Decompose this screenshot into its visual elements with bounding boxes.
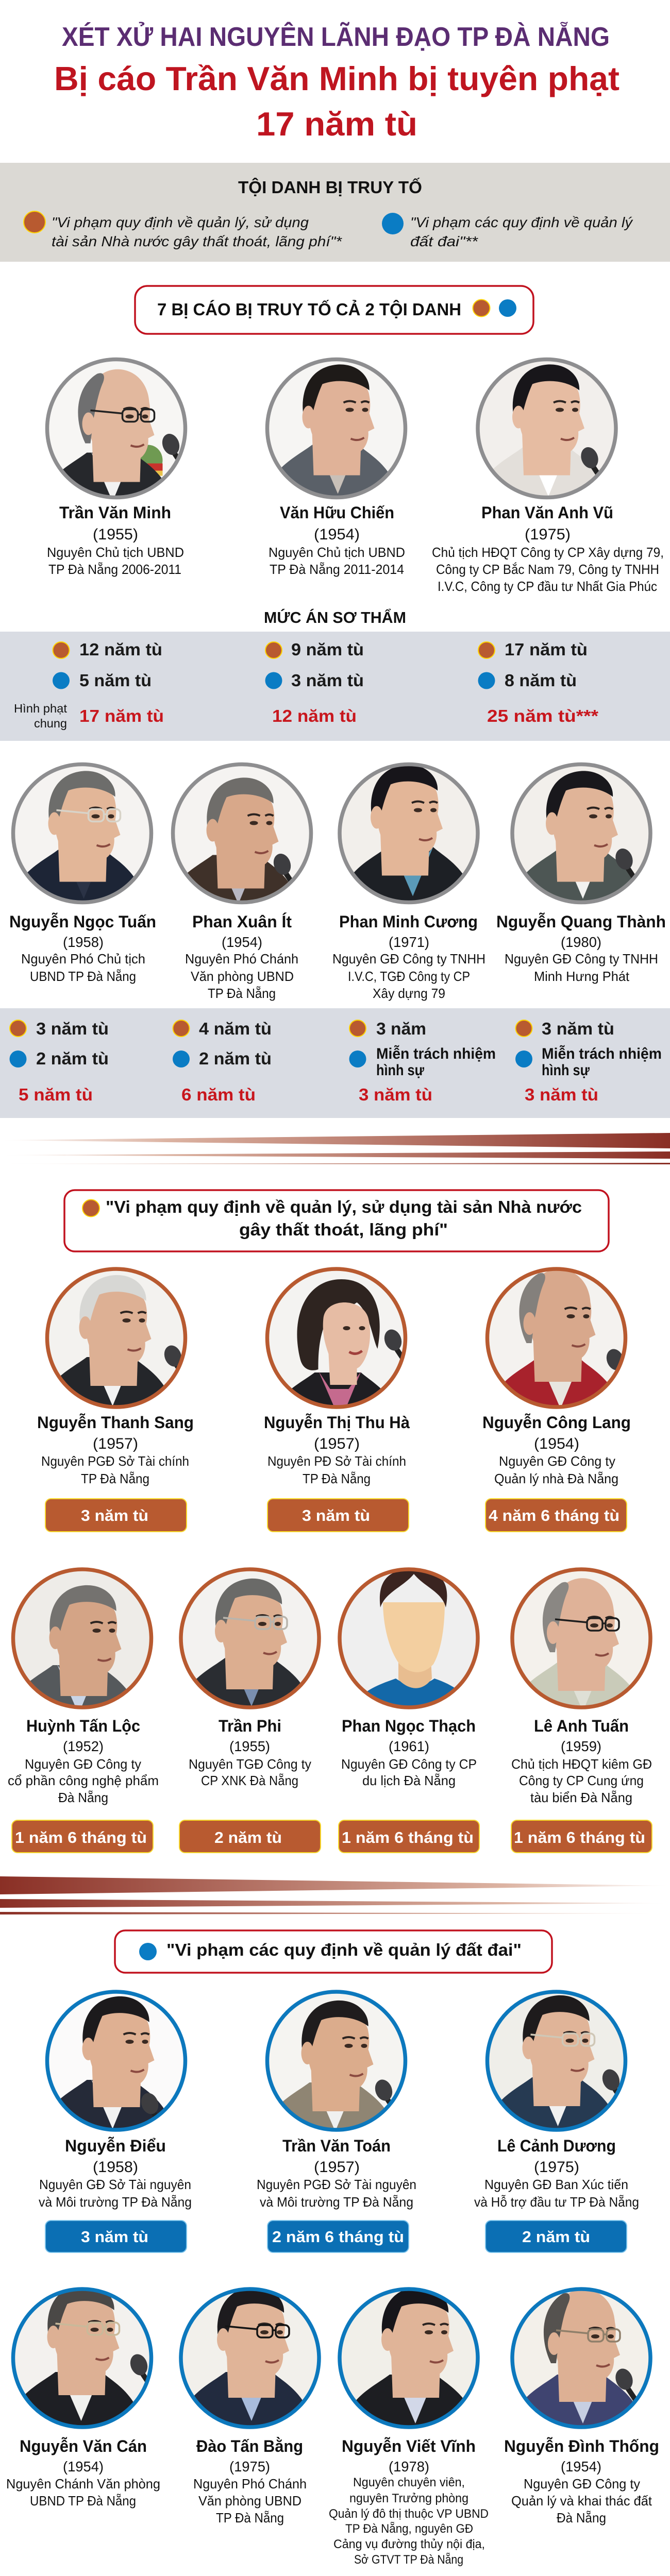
sentences: Văn Hữu Chiến: 3 năm tù — [291, 671, 364, 690]
year: (1978) — [389, 2459, 429, 2475]
sentences: Phan Xuân Ít: 4 năm tù — [199, 1019, 272, 1038]
person: Nguyễn Văn Cán — [6, 2284, 160, 2576]
year: (1961) — [389, 1738, 429, 1754]
sentences: Phan Xuân Ít: 6 năm tù — [181, 1085, 256, 1104]
year: (1954) — [314, 526, 360, 543]
portrait — [340, 2287, 478, 2431]
year: (1954) — [222, 934, 262, 950]
sentence badge: 2 năm tù — [522, 2228, 590, 2246]
role: TP Đà Nẵng — [216, 2510, 284, 2526]
portrait — [39, 360, 188, 509]
role: TP Đà Nẵng 2011-2014 — [270, 562, 404, 577]
panel: sentences next four — [0, 1008, 670, 1118]
portrait — [475, 360, 616, 504]
role: Nguyên Phó Chủ tịch — [21, 951, 145, 967]
name: Nguyễn Đình Thống — [504, 2437, 659, 2455]
name: Đào Tấn Bằng — [196, 2437, 303, 2455]
sentences: Nguyễn Quang Thành: hình sự — [542, 1062, 590, 1079]
person: Nguyễn Ngọc Tuấn — [9, 765, 156, 984]
sentences: Trần Văn Minh: 5 năm tù — [79, 671, 152, 690]
name: Nguyễn Viết Vĩnh — [342, 2437, 476, 2455]
person: Nguyễn Quang Thành — [496, 765, 666, 984]
role — [193, 2476, 307, 2526]
role: Công ty CP Cung ứng — [519, 1773, 644, 1788]
portrait — [10, 765, 152, 907]
sentence badge — [179, 1820, 321, 1853]
year: (1958) — [93, 2159, 138, 2176]
sentences: Trần Văn Minh: 17 năm tù — [79, 706, 164, 725]
role — [511, 2476, 652, 2526]
role: nguyên Trưởng phòng — [349, 2492, 468, 2505]
role: Nguyên GĐ Sở Tài nguyên — [39, 2177, 191, 2192]
sentences: Văn Hữu Chiến: 9 năm tù — [291, 640, 364, 659]
role: Nguyên GĐ Ban Xúc tiến — [484, 2177, 628, 2192]
role — [474, 2177, 639, 2210]
year: (1955) — [93, 526, 138, 543]
year: (1957) — [314, 1435, 360, 1452]
role — [269, 545, 405, 577]
year: (1955) — [229, 1738, 270, 1754]
callout: asset-management charge — [64, 1190, 609, 1251]
role: TP Đà Nẵng — [81, 1471, 149, 1486]
role: Đà Nẵng — [58, 1790, 108, 1805]
role: Quản lý đô thị thuộc VP UBND — [329, 2507, 489, 2521]
sentence badge — [267, 2221, 409, 2252]
role: Chủ tịch HĐQT kiêm GĐ — [511, 1756, 652, 1772]
role: I.V.C, TGĐ Công ty CP — [348, 969, 470, 984]
sentences: Trần Văn Minh: 12 năm tù — [79, 640, 162, 659]
person: Trần Văn Toán — [257, 1992, 416, 2252]
role — [6, 2476, 160, 2509]
role: Nguyên GĐ Công ty — [499, 1453, 615, 1469]
year: (1975) — [525, 526, 571, 543]
sentences: Văn Hữu Chiến: 12 năm tù — [272, 706, 357, 725]
label: combined penalty: chung — [34, 717, 67, 730]
name: Nguyễn Thanh Sang — [37, 1413, 194, 1432]
title line: headline 2: 17 năm tù — [256, 105, 417, 143]
name: Lê Cảnh Dương — [497, 2137, 616, 2155]
callout: 7 defendants: 7 BỊ CÁO BỊ TRUY TỐ CẢ 2 TỘI DANH — [157, 299, 461, 319]
person: Phan Xuân Ít — [165, 765, 311, 1001]
title — [54, 22, 619, 143]
year: (1954) — [534, 1435, 579, 1452]
person: Lê Cảnh Dương — [474, 1992, 639, 2252]
callout: land-management charge — [115, 1930, 552, 1973]
year: (1954) — [63, 2459, 104, 2475]
portrait — [165, 765, 311, 912]
portrait — [7, 2284, 156, 2429]
role: Đà Nẵng — [557, 2510, 606, 2526]
panel: sentences top three — [0, 632, 670, 741]
sentence badge: 1 năm 6 tháng tù — [15, 1828, 147, 1846]
portrait — [178, 1569, 319, 1714]
sentence badge — [485, 1499, 627, 1532]
person: Nguyễn Thị Thu Hà — [264, 1269, 410, 1532]
role — [189, 1756, 311, 1788]
person: Nguyễn Thanh Sang — [37, 1269, 194, 1532]
year: (1975) — [229, 2459, 270, 2475]
year: (1975) — [534, 2159, 579, 2176]
legend: charge 2: "Vi phạm các quy định về quản lý — [410, 214, 633, 230]
callout: asset-management charge: "Vi phạm quy định về quản lý, sử dụng tài sản Nhà nước — [106, 1197, 582, 1216]
legend: charge 2: đất đai"** — [410, 233, 478, 249]
callout: asset-management charge: gây thất thoát, lãng phí" — [239, 1220, 448, 1239]
year: (1954) — [561, 2459, 601, 2475]
year: (1957) — [93, 1435, 138, 1452]
sentences: Phan Minh Cương: hình sự — [376, 1062, 424, 1079]
year: (1959) — [561, 1738, 601, 1754]
role — [332, 951, 485, 1001]
person: Trần Văn Minh — [39, 360, 188, 577]
name: Văn Hữu Chiến — [280, 503, 394, 522]
legend: charge 1: "Vi phạm quy định về quản lý, sử dụng — [52, 214, 309, 230]
person: Văn Hữu Chiến — [264, 360, 405, 577]
sentences: Phan Xuân Ít: 2 năm tù — [199, 1049, 272, 1068]
callout: 7 defendants — [135, 286, 533, 334]
sentences: Nguyễn Quang Thành: 3 năm tù — [525, 1085, 598, 1104]
name: Trần Văn Minh — [59, 503, 171, 522]
role: Nguyên GĐ Công ty TNHH — [505, 951, 658, 967]
sentences: Phan Văn Anh Vũ: 17 năm tù — [505, 640, 588, 659]
name: Nguyễn Công Lang — [482, 1413, 631, 1432]
sentence badge: 1 năm 6 tháng tù — [514, 1828, 645, 1846]
sentences: Nguyễn Quang Thành: Miễn trách nhiệm — [542, 1045, 662, 1062]
person: Huỳnh Tấn Lộc — [5, 1569, 159, 1853]
name: Nguyễn Thị Thu Hà — [264, 1413, 410, 1432]
portrait — [487, 1269, 632, 1416]
role: TP Đà Nẵng, nguyên GĐ — [345, 2521, 473, 2536]
role: Quản lý và khai thác đất — [511, 2493, 652, 2509]
name: Nguyễn Văn Cán — [20, 2437, 147, 2455]
sentences: Văn Hữu Chiến — [265, 640, 364, 725]
role — [341, 1756, 477, 1788]
name: Phan Xuân Ít — [192, 912, 292, 931]
name: Nguyễn Quang Thành — [496, 912, 666, 931]
year: (1952) — [63, 1738, 104, 1754]
role: Nguyên Chánh Văn phòng — [6, 2476, 160, 2492]
person: Đào Tấn Bằng — [178, 2287, 321, 2576]
sentence badge — [511, 1820, 652, 1853]
sentences: Nguyễn Quang Thành — [515, 1019, 662, 1104]
label: combined penalty: Hình phạt — [14, 702, 68, 715]
sentence badge — [339, 1820, 479, 1853]
callout: land-management charge: "Vi phạm các quy định về quản lý đất đai" — [166, 1940, 522, 1959]
portrait — [264, 360, 405, 502]
name: Huỳnh Tấn Lộc — [26, 1717, 140, 1735]
sentence badge — [267, 1499, 409, 1532]
role: Nguyên chuyên viên, — [353, 2476, 465, 2489]
year: (1971) — [389, 934, 429, 950]
name: Trần Văn Toán — [282, 2137, 391, 2155]
role — [21, 951, 145, 984]
sentences: Phan Minh Cương: Miễn trách nhiệm — [376, 1045, 496, 1062]
role — [494, 1453, 618, 1486]
name: Lê Anh Tuấn — [534, 1717, 629, 1735]
name: Nguyễn Ngọc Tuấn — [9, 912, 156, 931]
portrait — [484, 1992, 628, 2134]
role: Nguyên PGĐ Sở Tài chính — [41, 1453, 189, 1469]
name: Trần Phi — [219, 1717, 281, 1735]
person: Nguyễn Viết Vĩnh — [329, 2287, 489, 2576]
person: Nguyễn Điểu — [39, 1992, 192, 2252]
role: và Môi trường TP Đà Nẵng — [39, 2194, 192, 2210]
role — [8, 1756, 159, 1805]
sentences: Phan Văn Anh Vũ — [478, 640, 598, 725]
name: Phan Minh Cương — [339, 912, 478, 931]
person: Nguyễn Công Lang — [482, 1269, 632, 1532]
title line: headline 1: Bị cáo Trần Văn Minh bị tuyên phạt — [54, 60, 619, 97]
role: Văn phòng UBND — [198, 2493, 301, 2509]
role: I.V.C, Công ty CP đầu tư Nhất Gia Phúc — [438, 579, 657, 594]
sentences: Phan Minh Cương: 3 năm tù — [359, 1085, 432, 1104]
person: Nguyễn Đình Thống — [504, 2289, 659, 2576]
sentences: Trần Văn Minh — [53, 640, 164, 725]
role: Nguyên Phó Chánh — [185, 951, 298, 967]
role — [432, 545, 664, 594]
role — [39, 2177, 192, 2210]
sentence badge: 2 năm tù — [214, 1828, 282, 1846]
year: (1957) — [314, 2159, 360, 2176]
portrait — [39, 1992, 186, 2137]
person: Phan Ngọc Thạch (placeholder silhouette) — [339, 1569, 479, 1853]
person: Phan Văn Anh Vũ — [432, 360, 664, 594]
sentence badge: 3 năm tù — [81, 1506, 148, 1524]
sentence badge: 4 năm 6 tháng tù — [489, 1506, 619, 1524]
role: Cảng vụ đường thủy nội địa, — [333, 2537, 485, 2551]
portrait — [39, 1269, 190, 1414]
sentences: Nguyễn Ngọc Tuấn — [9, 1019, 109, 1104]
name: Phan Văn Anh Vũ — [481, 503, 613, 522]
role: Nguyên Phó Chánh — [193, 2476, 307, 2492]
sentences: Phan Văn Anh Vũ: 25 năm tù*** — [487, 706, 598, 725]
role: Xây dựng 79 — [373, 986, 445, 1001]
role — [257, 2177, 416, 2210]
role: Văn phòng UBND — [191, 969, 294, 984]
portrait — [5, 1569, 152, 1722]
role: TP Đà Nẵng — [303, 1471, 371, 1486]
legend: charge 1 — [24, 211, 342, 249]
role — [505, 951, 658, 984]
role: Quản lý nhà Đà Nẵng — [494, 1471, 618, 1486]
sentences: Phan Minh Cương: 3 năm — [376, 1019, 426, 1038]
portrait — [339, 765, 478, 904]
role: Nguyên GĐ Công ty TNHH — [332, 951, 485, 967]
role — [47, 545, 184, 577]
heading: first-instance sentences: MỨC ÁN SƠ THẨM — [264, 608, 406, 626]
portrait — [178, 2287, 319, 2429]
role: Nguyên PGĐ Sở Tài nguyên — [257, 2177, 416, 2192]
portrait — [340, 1569, 478, 1710]
role: Nguyên Chủ tịch UBND — [47, 545, 184, 560]
role: Nguyên TGĐ Công ty — [189, 1756, 311, 1772]
panel: charges — [0, 163, 670, 262]
role — [329, 2476, 489, 2567]
sentence badge — [485, 2221, 627, 2252]
sentences: Phan Minh Cương — [349, 1019, 496, 1104]
role: Nguyên GĐ Công ty CP — [341, 1756, 477, 1772]
legend: charge 2 — [382, 213, 633, 249]
portrait — [509, 1569, 650, 1719]
sentences: Phan Xuân Ít — [173, 1019, 272, 1104]
role — [267, 1453, 406, 1486]
heading: charges: TỘI DANH BỊ TRUY TỐ — [238, 177, 422, 197]
role: và Hỗ trợ đầu tư TP Đà Nẵng — [474, 2194, 639, 2210]
sentence badge — [45, 1499, 187, 1532]
role — [41, 1453, 189, 1486]
role: UBND TP Đà Nẵng — [30, 969, 136, 984]
sentence badge: 2 năm 6 tháng tù — [272, 2228, 404, 2246]
year: (1980) — [561, 934, 601, 950]
person: Lê Anh Tuấn — [509, 1569, 652, 1853]
role: tàu biển Đà Nẵng — [530, 1790, 632, 1805]
role — [185, 951, 298, 1001]
role — [511, 1756, 652, 1805]
role: Sở GTVT TP Đà Nẵng — [354, 2552, 463, 2567]
role: Minh Hưng Phát — [534, 969, 630, 984]
role: Công ty CP Bắc Nam 79, Công ty TNHH — [436, 562, 659, 577]
role: TP Đà Nẵng — [208, 986, 276, 1001]
role: TP Đà Nẵng 2006-2011 — [48, 562, 181, 577]
role: Nguyên PĐ Sở Tài chính — [267, 1453, 406, 1469]
portrait — [509, 765, 650, 907]
year: (1958) — [63, 934, 104, 950]
sentences: Nguyễn Ngọc Tuấn: 3 năm tù — [36, 1019, 109, 1038]
role: Nguyên GĐ Công ty — [25, 1756, 141, 1772]
role: Nguyên GĐ Công ty — [524, 2476, 640, 2492]
name: Nguyễn Điểu — [65, 2137, 166, 2155]
sentence badge: 3 năm tù — [81, 2228, 148, 2246]
sentences: Nguyễn Ngọc Tuấn: 2 năm tù — [36, 1049, 109, 1068]
sentence badge — [45, 2221, 187, 2252]
legend: charge 1: tài sản Nhà nước gây thất thoát, lãng phí"* — [52, 233, 342, 249]
portrait — [509, 2289, 650, 2431]
role: cổ phần công nghệ phẩm — [8, 1773, 159, 1788]
sentence badge — [12, 1820, 153, 1853]
label: combined penalty — [14, 702, 68, 730]
portrait — [262, 1992, 405, 2139]
role: du lịch Đà Nẵng — [362, 1773, 456, 1788]
portrait — [265, 1267, 407, 1409]
sentence badge: 3 năm tù — [302, 1506, 370, 1524]
role: Nguyên Chủ tịch UBND — [269, 545, 405, 560]
name: Phan Ngọc Thạch — [342, 1717, 476, 1735]
person: Trần Phi — [178, 1569, 321, 1853]
sentence badge: 1 năm 6 tháng tù — [342, 1828, 474, 1846]
sentences: Nguyễn Quang Thành: 3 năm tù — [542, 1019, 614, 1038]
role: CP XNK Đà Nẵng — [201, 1773, 298, 1788]
person: Phan Minh Cương — [332, 765, 485, 1001]
sentences: Nguyễn Ngọc Tuấn: 5 năm tù — [19, 1085, 93, 1104]
role: UBND TP Đà Nẵng — [30, 2493, 136, 2509]
role: và Môi trường TP Đà Nẵng — [260, 2194, 413, 2210]
title line: kicker: XÉT XỬ HAI NGUYÊN LÃNH ĐẠO TP ĐÀ NẴNG — [62, 22, 610, 52]
sentences: Phan Văn Anh Vũ: 8 năm tù — [505, 671, 577, 690]
